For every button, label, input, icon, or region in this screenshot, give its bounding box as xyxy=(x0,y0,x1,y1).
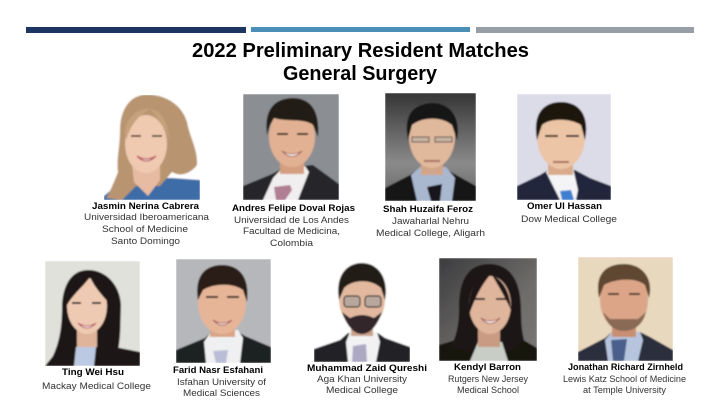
school: Santo Domingo xyxy=(111,236,180,246)
school: Aga Khan University xyxy=(317,374,408,384)
school xyxy=(448,374,528,395)
name: Jonathan Richard Zirnheld xyxy=(568,362,683,372)
profile: Kendyl Barron xyxy=(439,258,537,395)
school: Colombia xyxy=(270,238,313,248)
profile: Shah Huzaifa Feroz xyxy=(376,93,485,238)
school: Medical Sciences xyxy=(183,388,261,398)
portrait: Shah xyxy=(385,93,476,201)
profile: Farid Nasr Esfahani xyxy=(173,259,271,398)
profile: Omer Ul Hassan xyxy=(517,94,617,224)
portrait: Muhammad xyxy=(314,262,410,362)
school: Lewis Katz School of Medicine xyxy=(563,374,686,384)
school: Facultad de Medicina, xyxy=(243,226,340,236)
profile: Ting Wei Hsu xyxy=(42,261,151,391)
school: Medical College, Aligarh xyxy=(376,228,485,238)
school xyxy=(563,374,686,395)
school xyxy=(177,377,267,398)
school: at Temple University xyxy=(583,385,667,395)
school: School of Medicine xyxy=(102,224,188,234)
school: Universidad Iberoamericana xyxy=(84,212,209,222)
school: Medical School xyxy=(457,385,519,395)
name: Kendyl Barron xyxy=(454,362,521,372)
school xyxy=(234,215,350,248)
portrait: Ting xyxy=(45,261,140,366)
school: Universidad de Los Andes xyxy=(234,215,350,225)
name: Muhammad Zaid Qureshi xyxy=(307,363,427,373)
school xyxy=(84,212,209,246)
header bars xyxy=(26,27,694,33)
name: Jasmin Nerina Cabrera xyxy=(92,201,200,211)
school: Isfahan University of xyxy=(177,377,267,387)
name: Omer Ul Hassan xyxy=(527,201,602,211)
name: Andres Felipe Doval Rojas xyxy=(232,203,355,213)
school xyxy=(317,374,408,395)
name: Farid Nasr Esfahani xyxy=(173,365,263,375)
school: Mackay Medical College xyxy=(42,381,151,391)
portrait: Kendyl xyxy=(439,258,537,361)
title xyxy=(192,40,529,85)
name: Ting Wei Hsu xyxy=(62,367,124,377)
title: 2022 Preliminary Resident Matches xyxy=(192,40,529,62)
title: General Surgery xyxy=(283,63,438,85)
portrait: Andres xyxy=(243,94,339,200)
portrait: Farid xyxy=(176,259,271,363)
school xyxy=(376,216,485,238)
profile: Jonathan Richard Zirnheld xyxy=(563,257,686,395)
profile: Muhammad Zaid Qureshi xyxy=(307,262,427,395)
profile: Andres Felipe Doval Rojas xyxy=(232,94,355,248)
school: Medical College xyxy=(326,385,398,395)
portrait: Omer xyxy=(517,94,611,200)
school: Rutgers New Jersey xyxy=(448,374,528,384)
name: Shah Huzaifa Feroz xyxy=(383,204,474,214)
school: Jawaharlal Nehru xyxy=(392,216,469,226)
portrait: Jonathan xyxy=(578,257,673,361)
portrait: Jasmin xyxy=(104,95,200,200)
profile: Jasmin Nerina Cabrera xyxy=(84,95,209,246)
school: Dow Medical College xyxy=(521,214,617,224)
